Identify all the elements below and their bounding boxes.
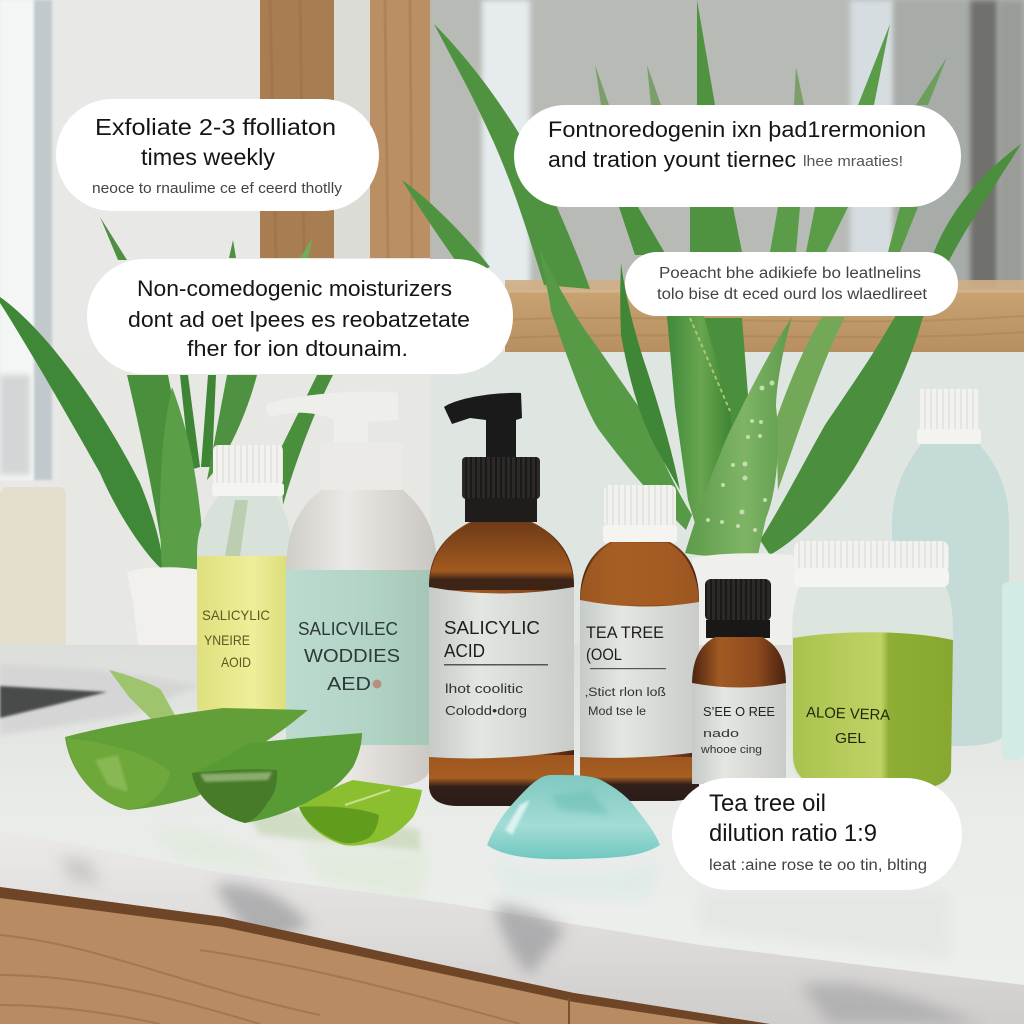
callout: exfoliation: times weekly [141, 144, 275, 170]
countertop front edge [0, 830, 1024, 1024]
yellow bottle [197, 445, 292, 722]
callout: exfoliation: Exfoliate 2-3 ffolliaton [95, 114, 336, 140]
callout: exfoliation: neoce to rnaulime ce ef ceerd thotlly [92, 180, 343, 197]
salicylic label: SALICYLIC [444, 617, 540, 638]
yellow bottle label: YNEIRE [204, 632, 250, 648]
aloe piece A [65, 708, 308, 810]
yellow bottle label: SALICYLIC [202, 607, 270, 623]
pump bottle label: SALICVILEC [298, 618, 398, 639]
small amber bottle [692, 579, 786, 784]
callout: moisturizers: fher for ion dtounaim. [187, 336, 408, 361]
jar label [806, 704, 890, 747]
leaf spots [706, 380, 774, 532]
callout: moisturizers [87, 259, 513, 374]
white pump bottle [266, 391, 437, 788]
callout: fontnoredogenin: Fontnoredogenin ixn þad1rermonion [548, 117, 926, 142]
pump bottle label: WODDIES [304, 645, 400, 666]
left pot body [127, 567, 200, 678]
callout: exfoliation [56, 99, 379, 211]
jar label: GEL [835, 730, 866, 747]
callout: tea tree dilution: Tea tree oil [709, 790, 826, 817]
callout: tea tree dilution: leat :aine rose te oo tin, blting [709, 857, 927, 874]
callout: fontnoredogenin: and tration yount tiernec [548, 147, 796, 172]
pump bottle label: AED [327, 673, 371, 694]
right background bottle [892, 389, 1024, 760]
tea tree label [585, 624, 666, 718]
yellow bottle label: AOID [221, 654, 251, 670]
callout: tea tree dilution [672, 778, 962, 890]
callout: moisturizers: Non-comedogenic moisturizers [137, 276, 452, 301]
left pot and aloe plant [0, 217, 333, 678]
salicylic label: ACID [444, 640, 485, 661]
callout: fontnoredogenin: lhee mraaties! [803, 154, 903, 170]
salicylic acid amber bottle [429, 393, 574, 806]
aloe leaf pieces [65, 670, 422, 846]
small bottle label: nado [703, 728, 739, 740]
small bottle label [700, 705, 775, 756]
aloe piece B [192, 733, 362, 823]
yellow bottle label [202, 607, 270, 670]
jar label: ALOE VERA [806, 704, 890, 724]
tea tree label: Mod tse le [588, 706, 646, 718]
tea tree label: (OOL [586, 646, 622, 664]
wooden shelf [505, 280, 1024, 352]
callout: tea tree dilution: dilution ratio 1:9 [709, 820, 877, 847]
callout: shelf note [625, 252, 958, 316]
salicylic label [444, 617, 548, 718]
marble counter [0, 645, 1024, 1024]
salicylic label: Colodd•dorg [445, 703, 527, 718]
salicylic label: lhot coolitic [445, 681, 524, 696]
callout: fontnoredogenin [514, 105, 961, 207]
tea tree bottle [580, 485, 699, 801]
aloe vera gel jar [792, 541, 953, 792]
pump bottle label [298, 618, 400, 694]
tea tree label: TEA TREE [586, 624, 664, 642]
teal gel blob [487, 775, 660, 859]
right pot [692, 553, 800, 700]
small bottle label: S’EE O REE [703, 705, 775, 719]
tea tree label: ‚Stict rlon loß [585, 687, 666, 699]
large aloe plant [402, 0, 1021, 700]
callout: shelf note: tolo bise dt eced ourd los wlaedlireet [657, 286, 928, 303]
wooden mirror frame [260, 0, 430, 258]
callout: moisturizers: dont ad oet lpees es reobatzetate [128, 307, 470, 332]
aloe piece C [299, 780, 422, 846]
small bottle label: whooe cing [700, 744, 762, 756]
callout: shelf note: Poeacht bhe adikiefe bo leatlnelins [659, 265, 921, 282]
